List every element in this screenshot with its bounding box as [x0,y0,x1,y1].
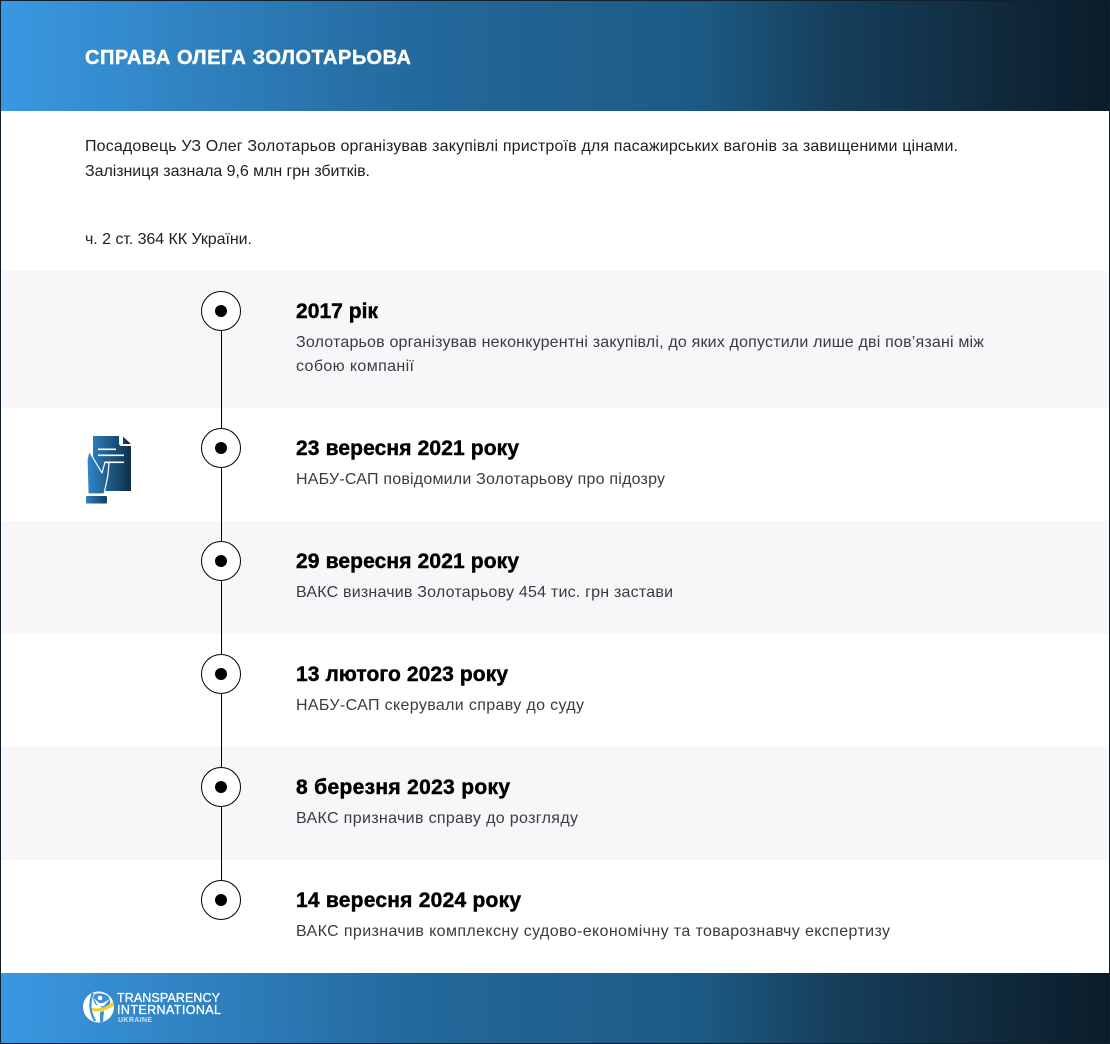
timeline entry: 23 September 2021 [202,428,665,488]
title: СПРАВА ОЛЕГА ЗОЛОТАРЬОВА [85,47,411,69]
timeline entry: 29 September 2021 [202,542,673,601]
timeline entry: 8 March 2023: ВАКС призначив справу до розгляду [296,810,578,827]
footer band [1,973,1109,1043]
intro text [85,138,958,180]
logo: Transparency International Ukraine: INTERNATIONAL [117,1003,221,1017]
intro text: Залізниця зазнала 9,6 млн грн збитків. [85,163,370,180]
row backgrounds [1,271,1109,860]
timeline entry: 14 September 2024: ВАКС призначив комплексну судово-економічну та товарознавчу експертизу [296,923,890,940]
timeline entry: 8 March 2023 [202,768,578,827]
legal article: ч. 2 ст. 364 КК України. [85,231,252,248]
logo: Transparency International Ukraine: TRANSPARENCY [117,991,221,1005]
timeline entry: 23 September 2021: 23 вересня 2021 року [296,437,519,460]
timeline entry: 13 February 2023 [202,654,584,714]
icon: hand holding document [86,436,131,504]
timeline entry: 13 February 2023: НАБУ-САП скерували справу до суду [296,697,584,714]
timeline entry: 13 February 2023: 13 лютого 2023 року [296,663,508,686]
timeline entry: 2017 [202,292,984,375]
intro text: Посадовець УЗ Олег Золотарьов організував закупівлі пристроїв для пасажирських вагонів за завищеними цінами. [85,138,958,155]
logo: Transparency International Ukraine [83,991,221,1024]
timeline entry: 29 September 2021: 29 вересня 2021 року [296,550,519,573]
timeline entry: 2017: 2017 рік [296,300,378,323]
timeline entry: 8 March 2023: 8 березня 2023 року [296,776,510,799]
timeline line [221,311,222,900]
header band [1,1,1109,111]
timeline entry: 14 September 2024: 14 вересня 2024 року [296,889,521,912]
timeline entry: 29 September 2021: ВАКС визначив Золотарьову 454 тис. грн застави [296,584,673,601]
timeline entry: 2017: собою компанії [296,358,415,375]
timeline entry: 23 September 2021: НАБУ-САП повідомили Золотарьову про підозру [296,471,665,488]
timeline entry: 14 September 2024 [202,880,890,940]
logo: Transparency International Ukraine: UKRAINE [118,1017,152,1024]
timeline entry: 2017: Золотарьов організував неконкурентні закупівлі, до яких допустили лише дві пов’язані між [296,334,984,351]
